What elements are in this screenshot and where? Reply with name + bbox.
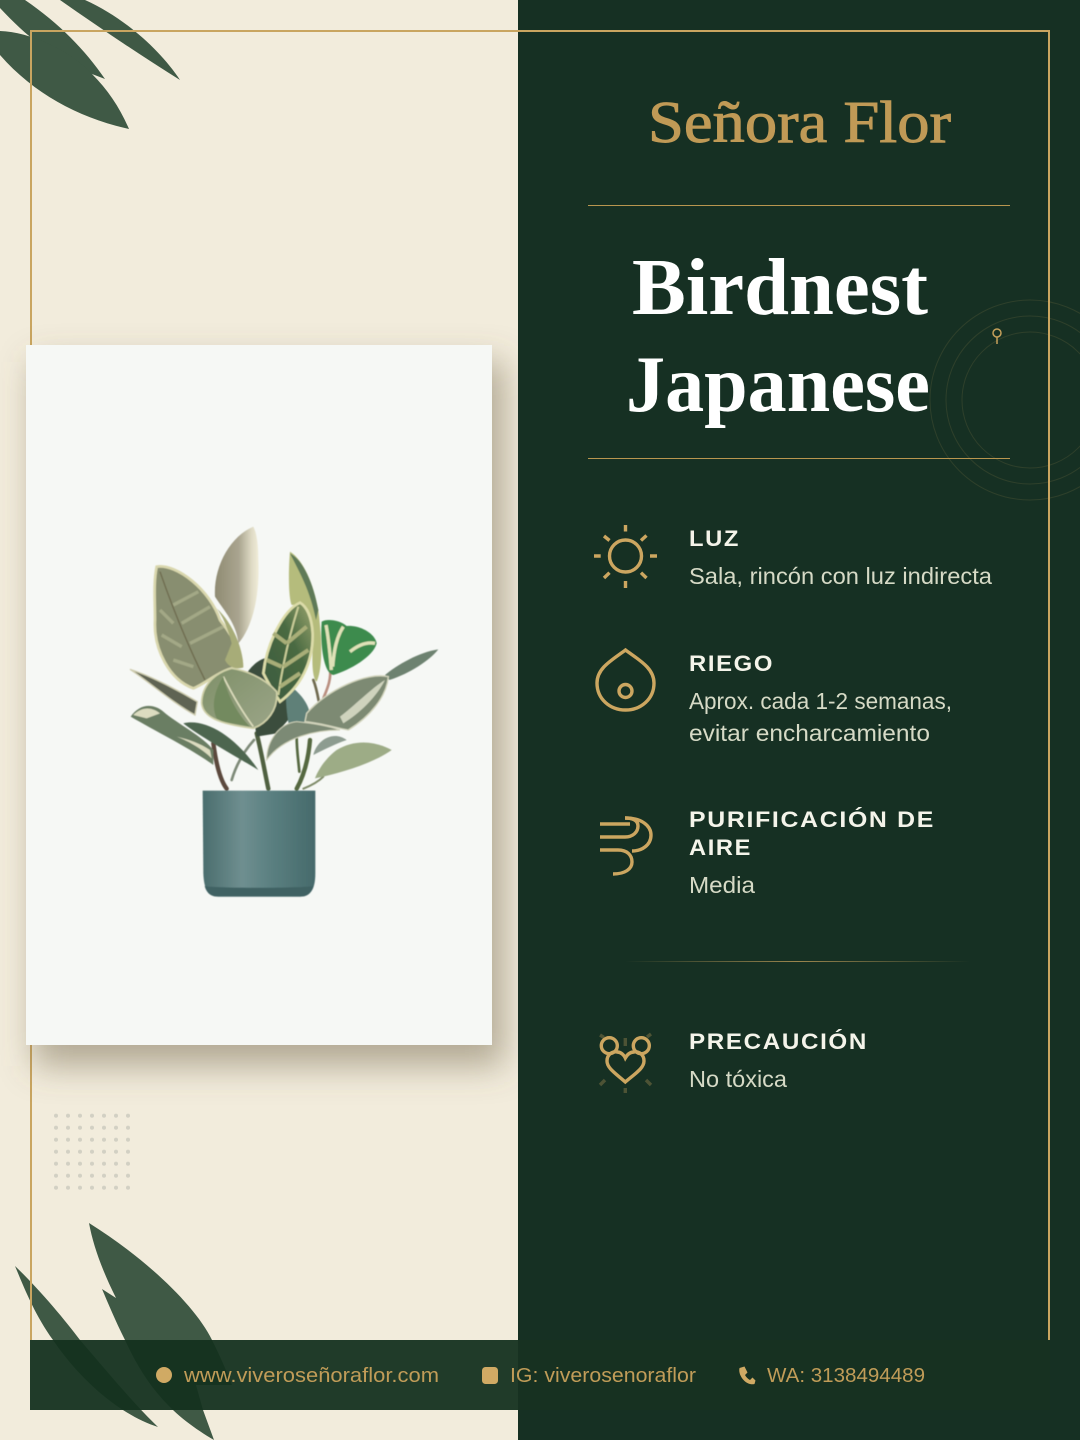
leaf: top cream [215,527,259,643]
plant title: Birdnest [632,244,928,332]
leaf: bright green [321,620,377,675]
leaf: tall yellow-green [289,552,321,682]
leaf: far right narrow [385,649,438,680]
PURIFICACIÓN text block: AIRE [689,835,752,860]
PURIFICACIÓN text block: PURIFICACIÓN DE [689,807,935,832]
RIEGO text block: evitar encharcamiento [689,720,930,746]
leaf: center variegated [263,603,313,702]
icon: water drop [597,650,654,710]
LUZ text block: LUZ [689,526,740,551]
icon: pet heart [600,1034,651,1093]
leaf: far left upper [130,669,197,715]
icon: small pin [993,329,1001,344]
leaf: dark behind center [247,657,297,737]
dot grid decoration [50,1110,134,1194]
left cream background [0,0,518,1440]
leaf: lower right [315,742,392,778]
decorative leaves: top left [0,0,180,129]
leaf: middle narrow [183,722,258,770]
RIEGO text block [689,651,952,746]
RIEGO text block: RIEGO [689,651,774,676]
decorative leaves: bottom left [15,1223,232,1440]
leaf: far left lower [131,706,213,765]
plant pot [203,791,315,897]
right dark green panel [518,0,1080,1440]
plant stems [213,667,330,789]
concentric circles decoration [930,300,1080,500]
plant card shadow [34,362,504,1066]
divider [588,205,1010,206]
LUZ text block: Sala, rincón con luz indirecta [689,563,992,589]
LUZ text block [689,526,992,589]
leaf: center front [202,668,277,728]
footer band [30,1340,1050,1410]
pot bottom band [205,886,313,897]
repaint of dark panel edge over shadow [518,300,548,1120]
PURIFICACIÓN text block [689,807,935,898]
footer: whatsapp: WA: 3138494489 [767,1365,925,1387]
plant title: Japanese [626,341,930,429]
leaf: small right under [313,736,347,755]
divider [588,458,1010,459]
plant photo card [26,345,492,1045]
PRECAUCIÓN text block: PRECAUCIÓN [689,1029,868,1054]
leaf: right large [305,676,388,730]
icon: wind [600,818,651,874]
PURIFICACIÓN text block: Media [689,872,755,898]
PRECAUCIÓN text block: No tóxica [689,1066,787,1092]
footer: instagram: IG: viverosenoraflor [510,1365,696,1387]
footer: website: www.viveroseñoraflor.com [183,1365,439,1387]
PRECAUCIÓN text block [689,1029,868,1092]
icon: sun [594,525,657,588]
RIEGO text block: Aprox. cada 1-2 semanas, [689,688,952,714]
fading divider [625,961,970,962]
plant title [626,244,930,429]
plant illustration [130,527,438,897]
brand name: Señora Flor [648,89,951,155]
leaf: big left [155,566,242,688]
leaf: mid right [267,722,340,760]
